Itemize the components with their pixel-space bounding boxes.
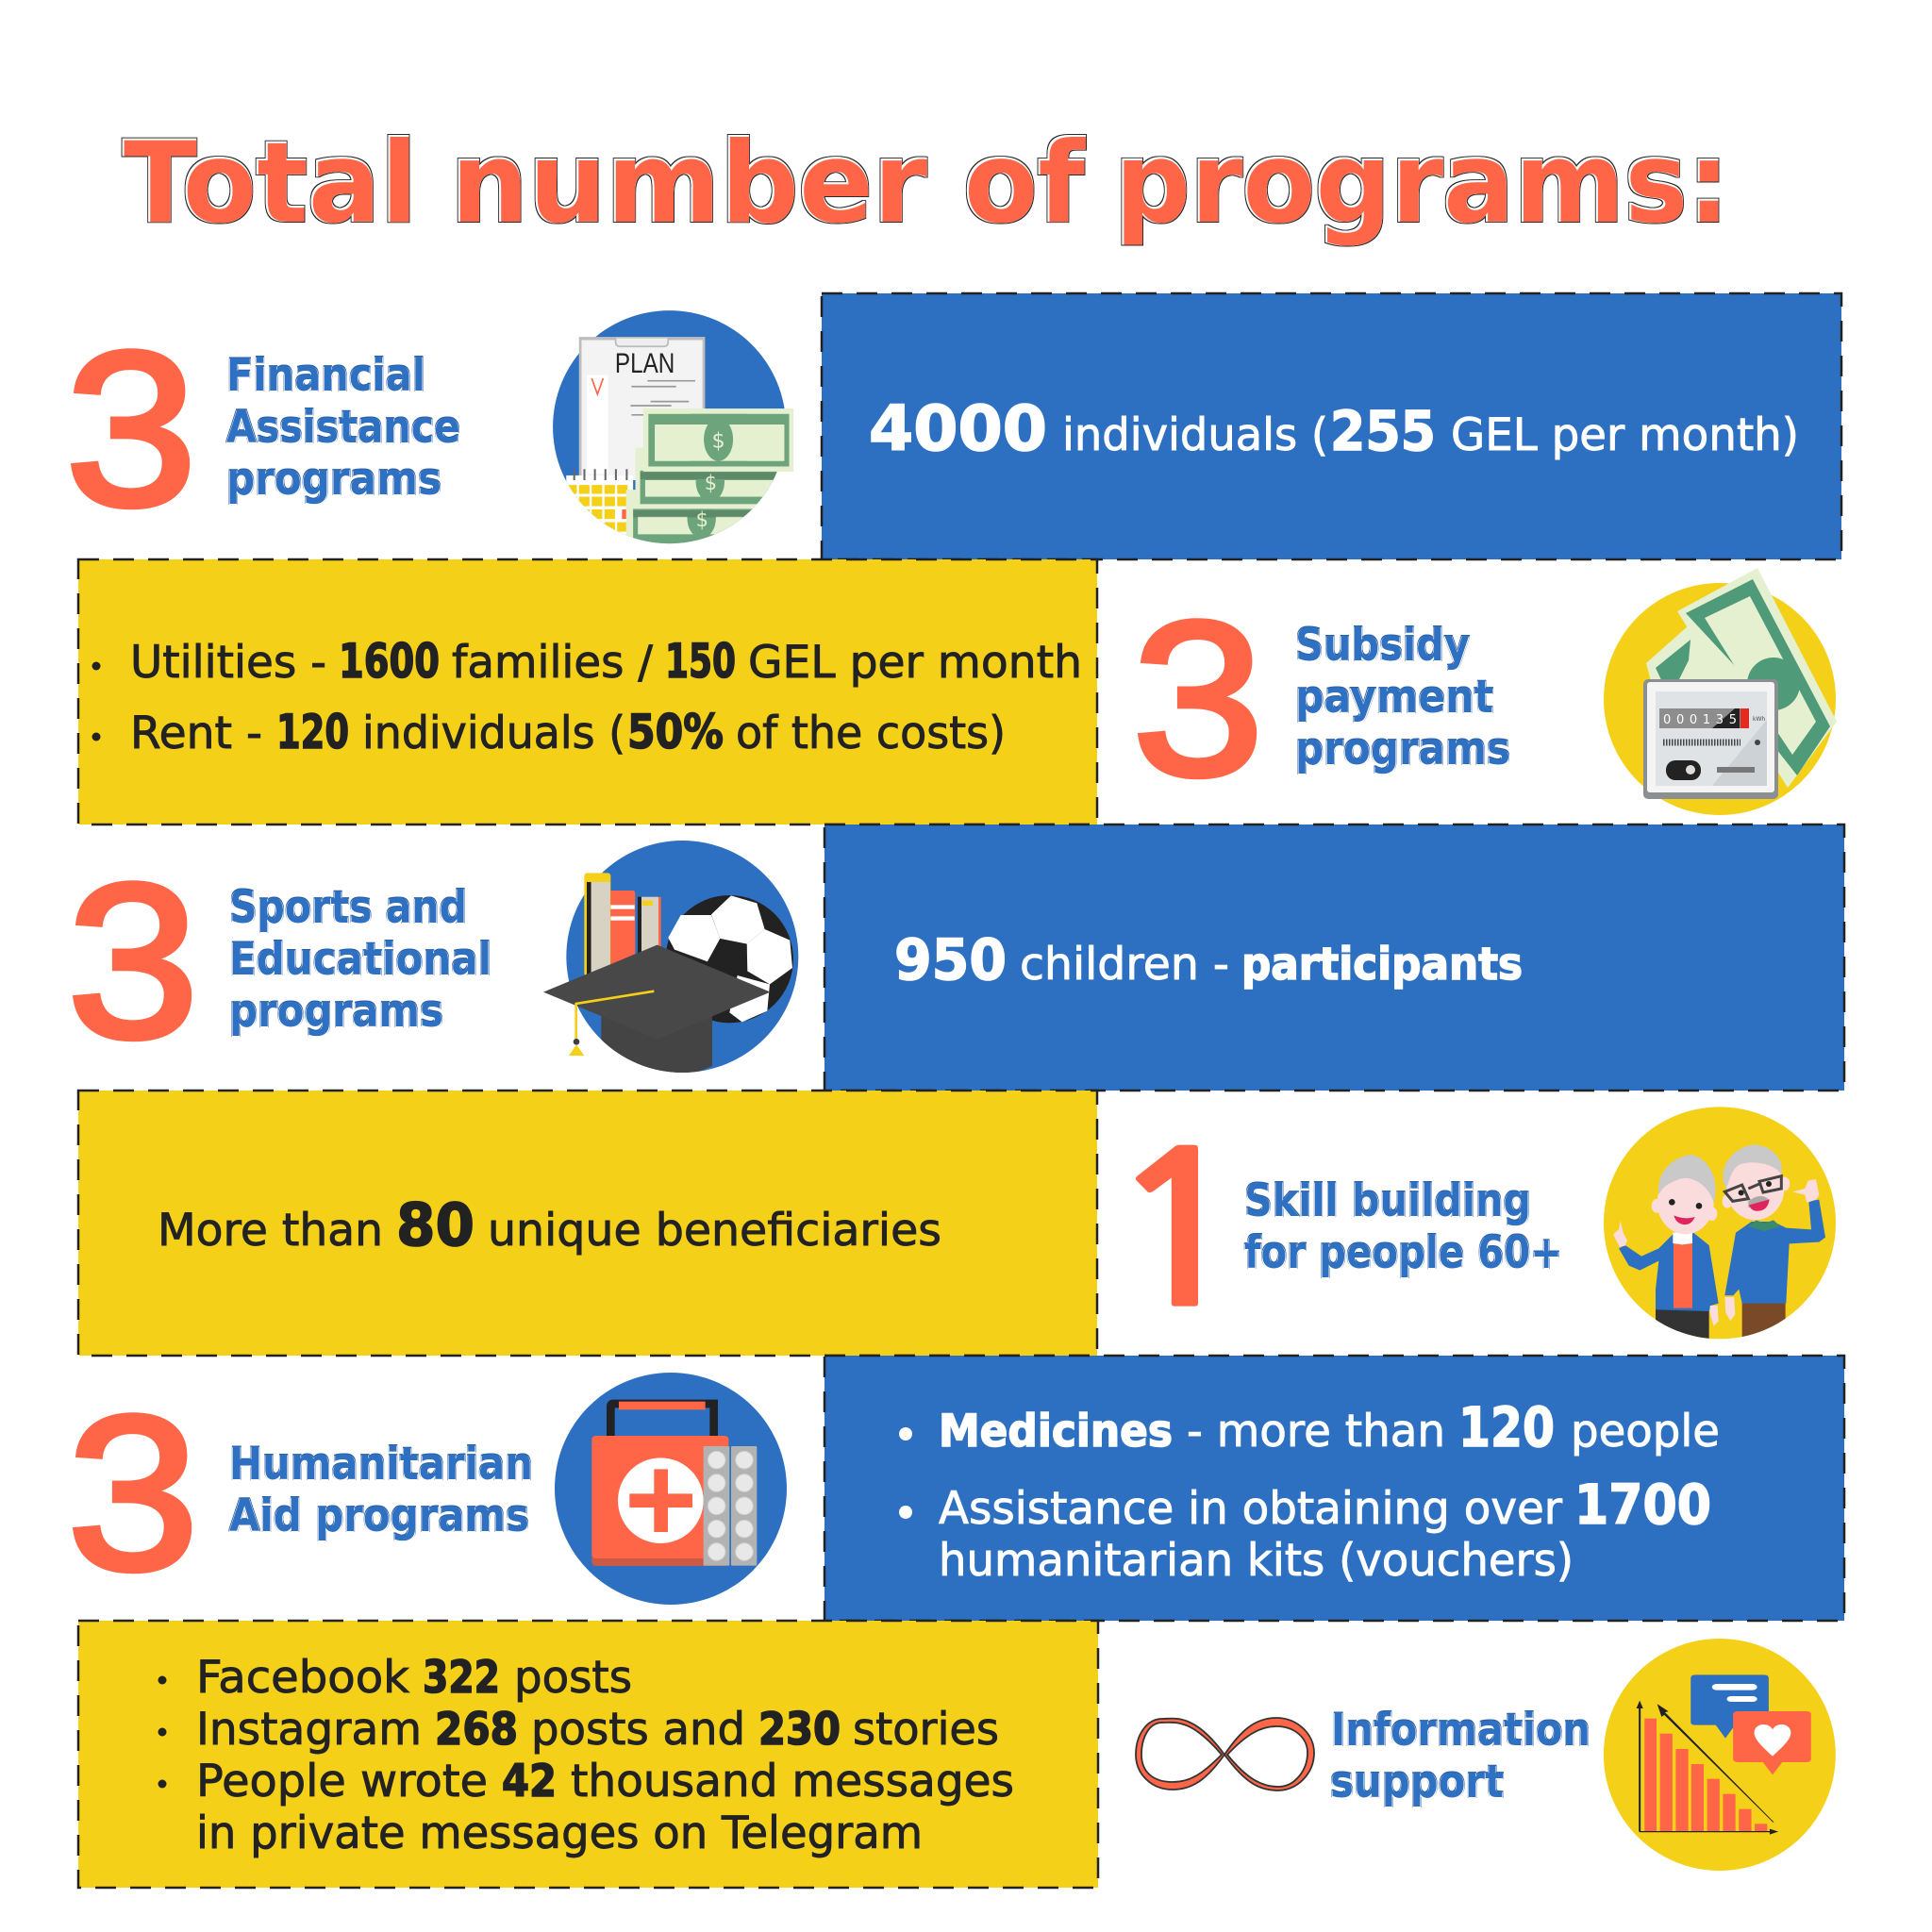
heading: humanitarian aid programs: Aid programs: [229, 1491, 529, 1542]
panel: subsidy result: [78, 559, 1097, 824]
text: utilities: Utilities -: [130, 637, 326, 689]
text: instagram: stories: [853, 1704, 999, 1756]
text: instagram: 268: [435, 1704, 518, 1756]
row 6: information support: [1136, 1639, 1836, 1871]
heading: financial assistance programs: [226, 350, 460, 506]
title: programs:: [1114, 118, 1729, 248]
text: telegram messages: 42: [502, 1756, 557, 1807]
text: utilities: [92, 634, 1082, 689]
text: 4000 individuals: 4000: [869, 392, 1047, 465]
text: instagram: Instagram: [196, 1704, 422, 1756]
icon: plan, calendar and money: $: [696, 508, 708, 531]
text: more than 80: 80: [396, 1191, 475, 1259]
text: facebook: posts: [514, 1652, 632, 1704]
text: 4000 individuals: [869, 392, 1799, 465]
text: medicines: [899, 1395, 1720, 1459]
text: rent: individuals (: [362, 708, 625, 759]
heading: information support: support: [1330, 1757, 1504, 1808]
heading: subsidy payment programs: payment: [1295, 672, 1493, 724]
text: utilities: 1600: [339, 634, 440, 689]
row 5: humanitarian aid: [67, 1371, 787, 1616]
text: facebook: [158, 1652, 632, 1704]
text: medicines: Medicines: [939, 1406, 1173, 1457]
title: number: [450, 118, 926, 248]
title: of: [963, 118, 1085, 248]
row 3: sports and education: [67, 839, 798, 1084]
text: humanitarian kits: [899, 1473, 1711, 1587]
text: humanitarian kits: 1700: [1574, 1473, 1711, 1537]
text: humanitarian kits: humanitarian kits (vouchers): [939, 1535, 1574, 1587]
heading: humanitarian aid programs: Humanitarian: [229, 1439, 533, 1491]
text: 950 children participants: [894, 927, 1523, 993]
text: medicines: people: [1571, 1406, 1720, 1457]
icon: plan, calendar and money: PLAN: [615, 348, 675, 379]
row 2: subsidy payments: [1132, 568, 1837, 822]
text: medicines: - more than: [1187, 1406, 1445, 1457]
row 4: skill building: [1104, 1107, 1836, 1342]
heading: humanitarian aid programs: [229, 1439, 533, 1542]
heading: financial assistance programs: Financial: [226, 350, 425, 402]
panel: financial assistance result: [822, 293, 1841, 559]
number: 3 sports: 3: [67, 839, 199, 1084]
text: 950 children participants: 950: [894, 927, 1007, 993]
heading: information support: Information: [1331, 1705, 1591, 1757]
text: 4000 individuals: 255: [1330, 399, 1436, 463]
heading: sports and educational programs: Educational: [229, 934, 491, 986]
icon: books, ball and graduation cap: [543, 841, 798, 1078]
heading: financial assistance programs: Assistance: [226, 402, 460, 454]
icon: electricity meter and money: [1604, 568, 1837, 815]
text: rent: 50%: [627, 705, 724, 759]
number: 1 skill building: 1: [1104, 1127, 1255, 1338]
panel: humanitarian result: [824, 1356, 1844, 1621]
text: 950 children participants: participants: [1241, 939, 1523, 991]
text: 4000 individuals: GEL per month): [1451, 409, 1799, 461]
heading: subsidy payment programs: programs: [1295, 724, 1510, 775]
number: 3 subsidy: 3: [1132, 576, 1264, 822]
text: more than 80: [158, 1191, 941, 1259]
text: humanitarian kits: Assistance in obtaining over: [939, 1483, 1563, 1535]
heading: skill building for people 60+: for people 60+: [1244, 1227, 1562, 1279]
icon: plan, calendar and money: $: [711, 429, 725, 454]
text: utilities: 150: [665, 634, 736, 689]
icon: chart and social bubbles: [1604, 1639, 1836, 1871]
text: rent: 120: [276, 705, 349, 759]
icon: plan, calendar and money: [553, 310, 793, 549]
text: instagram: [158, 1704, 999, 1756]
text: instagram: 230: [758, 1704, 841, 1756]
text: rent: [92, 705, 1006, 759]
icon: electricity meter and money: 000135: [1663, 713, 1737, 727]
text: rent: Rent -: [130, 708, 262, 759]
icon: first aid kit and pills: [555, 1373, 787, 1605]
text: more than 80: unique beneficiaries: [488, 1205, 941, 1257]
text: medicines: 120: [1458, 1395, 1555, 1459]
panel: information results: [78, 1621, 1098, 1888]
number: 3 financial: 3: [65, 307, 197, 552]
heading: subsidy payment programs: [1295, 620, 1510, 775]
heading: sports and educational programs: Sports and: [229, 882, 467, 934]
row 1: financial assistance: [65, 307, 793, 552]
text: telegram messages: in private messages on Telegram: [196, 1807, 923, 1859]
text: rent: of the costs): [736, 708, 1006, 759]
heading: skill building for people 60+: [1244, 1175, 1562, 1279]
panel: skill building result: [78, 1091, 1097, 1356]
heading: sports and educational programs: [229, 882, 491, 1038]
text: facebook: 322: [423, 1652, 500, 1704]
heading: skill building for people 60+: Skill building: [1244, 1175, 1531, 1227]
icon: infinity symbol: [1136, 1718, 1314, 1790]
text: utilities: families /: [452, 637, 653, 689]
text: facebook: Facebook: [196, 1652, 410, 1704]
icon: electricity meter and money: kWh: [1753, 716, 1765, 723]
heading: subsidy payment programs: Subsidy: [1295, 620, 1470, 672]
text: instagram: posts and: [531, 1704, 745, 1756]
text: 950 children participants: children -: [1020, 939, 1229, 991]
panel: sports result: [824, 824, 1844, 1091]
heading: information support: [1330, 1705, 1591, 1808]
text: utilities: GEL per month: [748, 637, 1082, 689]
title: [123, 118, 1729, 248]
text: 4000 individuals: individuals (: [1062, 409, 1328, 461]
title: Total: [123, 118, 417, 248]
text: telegram messages: thousand messages: [571, 1756, 1014, 1807]
icon: elderly couple: [1604, 1107, 1836, 1342]
text: more than 80: More than: [158, 1205, 383, 1257]
text: telegram messages: [158, 1756, 1014, 1859]
heading: sports and educational programs: programs: [229, 986, 443, 1038]
number: 3 humanitarian: 3: [67, 1371, 199, 1616]
icon: plan, calendar and money: $: [705, 472, 717, 494]
text: telegram messages: People wrote: [196, 1756, 488, 1807]
heading: financial assistance programs: programs: [226, 454, 441, 506]
